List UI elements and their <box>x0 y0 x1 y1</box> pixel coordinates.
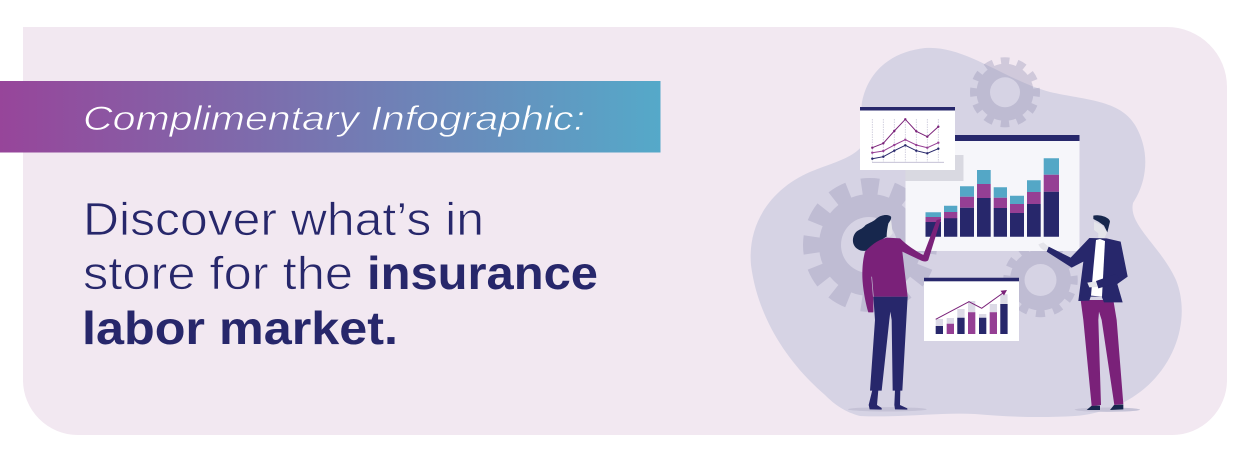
chart panel: line chart <box>860 107 955 170</box>
chart panel: trend bars <box>924 278 1019 341</box>
heading: insurance <box>367 247 598 299</box>
gear: lower right <box>1007 246 1074 314</box>
gear: top <box>973 61 1037 124</box>
heading: labor market. <box>82 302 398 354</box>
line series <box>872 119 938 159</box>
heading: store for the <box>83 247 353 299</box>
figure: man <box>1038 215 1140 412</box>
figure: woman <box>848 215 941 411</box>
line markers <box>872 119 938 159</box>
gear: large left <box>812 186 928 304</box>
banner: gradient ribbon <box>0 81 660 152</box>
illustration <box>751 48 1182 417</box>
arrow: trend line <box>936 290 1007 319</box>
heading: Discover what’s in <box>83 193 484 245</box>
heading <box>82 193 598 354</box>
background blob <box>751 48 1182 417</box>
banner label: Complimentary Infographic: <box>83 100 585 138</box>
chart panel: stacked bars <box>906 135 1080 251</box>
stacked bars <box>926 158 1059 237</box>
